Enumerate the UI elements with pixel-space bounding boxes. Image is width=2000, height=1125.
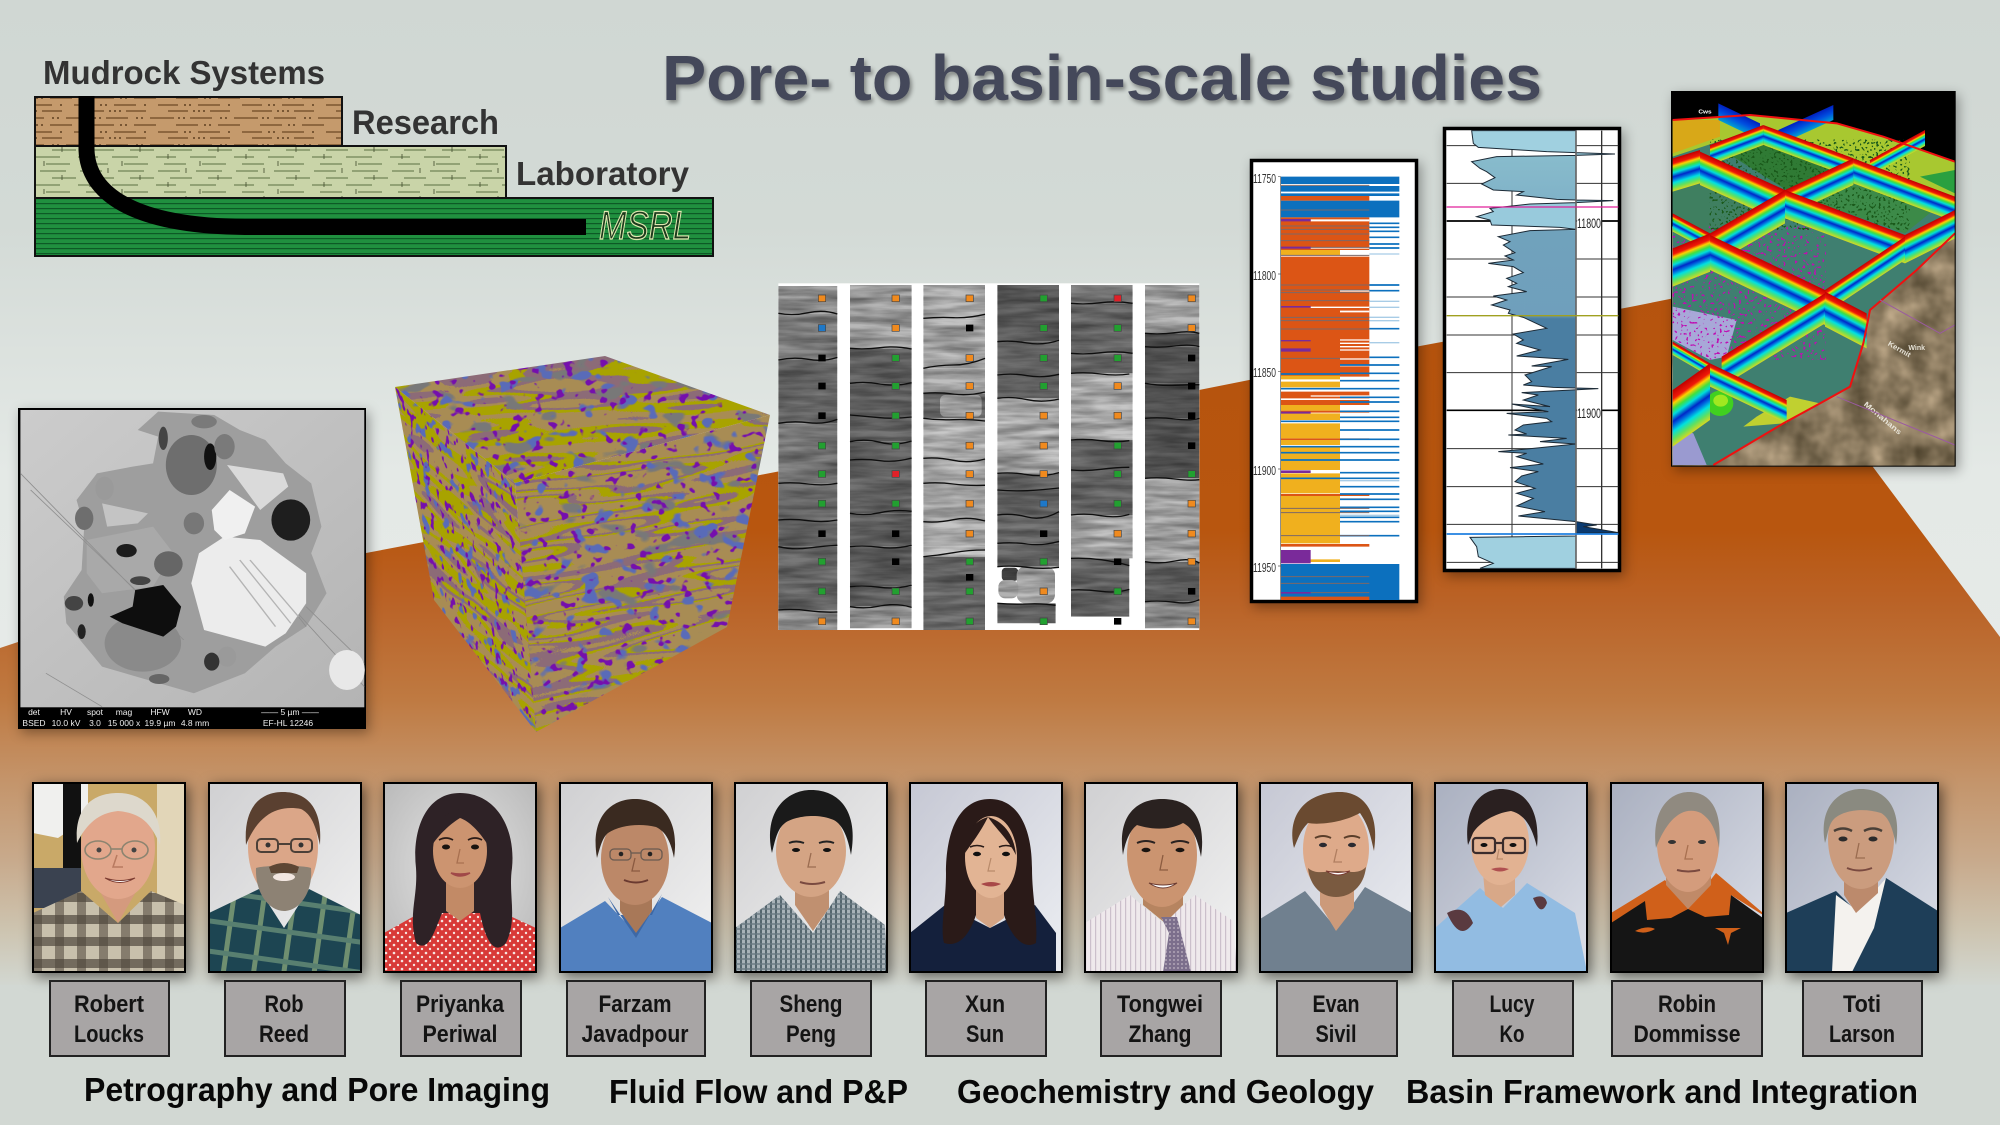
map labels bbox=[1698, 109, 1926, 437]
core slabs bbox=[778, 285, 1199, 630]
name tag: Robert Loucks bbox=[50, 981, 169, 1056]
map labels: Kermit bbox=[1886, 339, 1913, 360]
depth labels: 11750 bbox=[1253, 171, 1276, 186]
portrait: Priyanka Periwal bbox=[384, 783, 536, 972]
depth labels: 11950 bbox=[1253, 560, 1276, 575]
name tag: Lucy Ko: Lucy bbox=[1490, 991, 1535, 1018]
title: Pore- to basin-scale studies bbox=[662, 42, 1542, 114]
portrait: Toti Larson bbox=[1786, 783, 1938, 972]
name tag: Priyanka Periwal: Priyanka bbox=[416, 991, 505, 1018]
orange facies bbox=[1281, 196, 1369, 600]
heading: Basin Framework and Integration: Basin Framework and Integration bbox=[1406, 1073, 1918, 1110]
name tag: Lucy Ko: Ko bbox=[1500, 1021, 1524, 1048]
depth axis bbox=[1278, 177, 1281, 600]
3D pore network cube bbox=[395, 356, 770, 732]
depth label 11800: 11800 bbox=[1577, 215, 1601, 231]
map labels: Monahans bbox=[1862, 400, 1904, 437]
county lines bbox=[1837, 300, 1955, 445]
depth label 11900: 11900 bbox=[1577, 405, 1601, 421]
core photo strips bbox=[778, 283, 1199, 630]
name tag: Farzam Javadpour bbox=[567, 981, 705, 1056]
name tag: Tongwei Zhang bbox=[1101, 981, 1221, 1056]
depth track blue blocks bbox=[1281, 177, 1399, 600]
orange sample markers bbox=[818, 295, 1195, 625]
name tag: Toti Larson: Toti bbox=[1843, 991, 1881, 1018]
name tag: Robert Loucks: Loucks bbox=[74, 1021, 144, 1048]
name tag: Rob Reed: Reed bbox=[259, 1021, 309, 1048]
cube left face bbox=[395, 387, 536, 732]
yellow facies bbox=[1281, 250, 1340, 562]
SEM data bar: spot bbox=[87, 707, 104, 717]
blue sample markers bbox=[818, 325, 1047, 507]
name tag: Toti Larson bbox=[1803, 981, 1922, 1056]
portrait: Sheng Peng bbox=[735, 783, 887, 972]
name tag: Xun Sun: Xun bbox=[965, 991, 1005, 1018]
portrait: Farzam Javadpour bbox=[560, 783, 712, 972]
name tag: Sheng Peng: Peng bbox=[786, 1021, 836, 1048]
filled log curve bbox=[1470, 131, 1618, 568]
name tag: Tongwei Zhang: Zhang bbox=[1128, 1021, 1192, 1048]
heading: Petrography and Pore Imaging: Petrography and Pore Imaging bbox=[84, 1071, 550, 1108]
name tag: Robin Dommisse bbox=[1612, 981, 1762, 1056]
research layer bbox=[35, 97, 342, 146]
well speckles bbox=[1673, 227, 1826, 360]
map surface bbox=[1673, 115, 1955, 465]
pale blue interbeds bbox=[1340, 254, 1399, 515]
MSRL layer bbox=[35, 198, 713, 256]
SEM data bar: —— 5 µm —— bbox=[261, 707, 319, 717]
SEM data bar: 4.8 mm bbox=[181, 718, 209, 728]
log panel: wireline curve bbox=[1444, 128, 1620, 570]
name tag: Tongwei Zhang: Tongwei bbox=[1117, 991, 1203, 1018]
SEM data bar: mag bbox=[116, 707, 133, 717]
name tag: Lucy Ko bbox=[1453, 981, 1573, 1056]
name tag: Xun Sun bbox=[926, 981, 1046, 1056]
horizontal well bbox=[86, 96, 586, 227]
name tag: Robin Dommisse: Robin bbox=[1658, 991, 1716, 1018]
portrait: Tongwei Zhang bbox=[1085, 783, 1237, 972]
name tag: Evan Sivil: Sivil bbox=[1316, 1021, 1356, 1048]
label Mudrock Systems: Mudrock Systems bbox=[43, 54, 325, 91]
portrait: Rob Reed bbox=[209, 783, 361, 972]
3D basin framework model bbox=[1671, 91, 1956, 467]
cross-section fence walls bbox=[1673, 103, 1955, 447]
orange basin wedge bbox=[0, 284, 2000, 985]
grid lines bbox=[1447, 131, 1618, 568]
name tag: Rob Reed bbox=[225, 981, 345, 1056]
heading: Fluid Flow and P&P: Fluid Flow and P&P bbox=[609, 1073, 908, 1110]
name tag: Farzam Javadpour: Javadpour bbox=[582, 1021, 688, 1048]
name tag: Priyanka Periwal bbox=[401, 981, 521, 1056]
depth labels: 11800 bbox=[1253, 268, 1276, 283]
cube right face bbox=[515, 415, 770, 732]
black sample markers bbox=[818, 325, 1195, 625]
red sample markers bbox=[892, 295, 1121, 477]
portrait: Robert Loucks bbox=[33, 783, 185, 972]
SEM data bar: 19.9 µm bbox=[145, 718, 175, 728]
SEM data bar: HFW bbox=[150, 707, 170, 717]
name tag: Evan Sivil bbox=[1277, 981, 1397, 1056]
red model boundary bbox=[1673, 115, 1955, 465]
name tag: Sheng Peng bbox=[751, 981, 871, 1056]
map labels: Wink bbox=[1908, 343, 1926, 352]
SEM data bar: det bbox=[28, 707, 41, 717]
pink marker line bbox=[1447, 205, 1618, 209]
SEM data bar: 3.0 bbox=[89, 718, 101, 728]
cube top face bbox=[395, 356, 770, 483]
blue interbeds bbox=[1281, 223, 1399, 536]
satellite ground bbox=[1671, 227, 1956, 467]
laboratory layer bbox=[35, 146, 506, 198]
label Research: Research bbox=[352, 104, 499, 142]
depth labels bbox=[1253, 171, 1276, 575]
label MSRL: MSRL bbox=[599, 204, 691, 248]
name tag: Priyanka Periwal: Periwal bbox=[422, 1021, 498, 1048]
name tag: Xun Sun: Sun bbox=[966, 1021, 1004, 1048]
name tag: Toti Larson: Larson bbox=[1829, 1021, 1895, 1048]
green sample markers bbox=[818, 295, 1195, 625]
name tag: Robin Dommisse: Dommisse bbox=[1634, 1021, 1740, 1048]
grey stripes bbox=[1281, 185, 1369, 593]
log panel: lithofacies column bbox=[1252, 160, 1416, 602]
olive marker line bbox=[1447, 314, 1618, 318]
SEM data bar: WD bbox=[188, 707, 202, 717]
map labels: Cws bbox=[1698, 109, 1712, 115]
label Laboratory: Laboratory bbox=[516, 155, 690, 192]
white gaps in the facies column bbox=[1311, 219, 1369, 408]
SEM data bar: EF-HL 12246 bbox=[263, 718, 313, 728]
panel: MSRL logo strata bbox=[35, 54, 713, 256]
portrait: Xun Sun bbox=[910, 783, 1062, 972]
dark well dots bbox=[1710, 140, 1910, 230]
SEM data bar: 10.0 kV bbox=[52, 718, 81, 728]
depth label backgrounds bbox=[1577, 217, 1601, 418]
core fractures bbox=[778, 302, 1199, 612]
SEM data bar: BSED bbox=[22, 718, 46, 728]
heading: Geochemistry and Geology: Geochemistry and Geology bbox=[957, 1073, 1375, 1110]
SEM data bar bbox=[22, 707, 319, 728]
SEM data bar: HV bbox=[60, 707, 72, 717]
portrait: Evan Sivil bbox=[1260, 783, 1412, 972]
name tag: Sheng Peng: Sheng bbox=[780, 991, 842, 1018]
depth labels: 11850 bbox=[1253, 365, 1276, 380]
depth labels: 11900 bbox=[1253, 463, 1276, 478]
name tag: Evan Sivil: Evan bbox=[1312, 991, 1360, 1018]
name tag: Rob Reed: Rob bbox=[264, 991, 304, 1018]
SEM pore image bbox=[18, 408, 366, 729]
portrait: Lucy Ko bbox=[1435, 783, 1587, 972]
SEM data bar: 15 000 x bbox=[108, 718, 141, 728]
blue marker line bbox=[1447, 531, 1618, 536]
purple facies bbox=[1281, 219, 1311, 594]
portrait: Robin Dommisse bbox=[1611, 783, 1763, 972]
name tag: Robert Loucks: Robert bbox=[74, 991, 144, 1018]
name tag: Farzam Javadpour: Farzam bbox=[598, 991, 672, 1018]
